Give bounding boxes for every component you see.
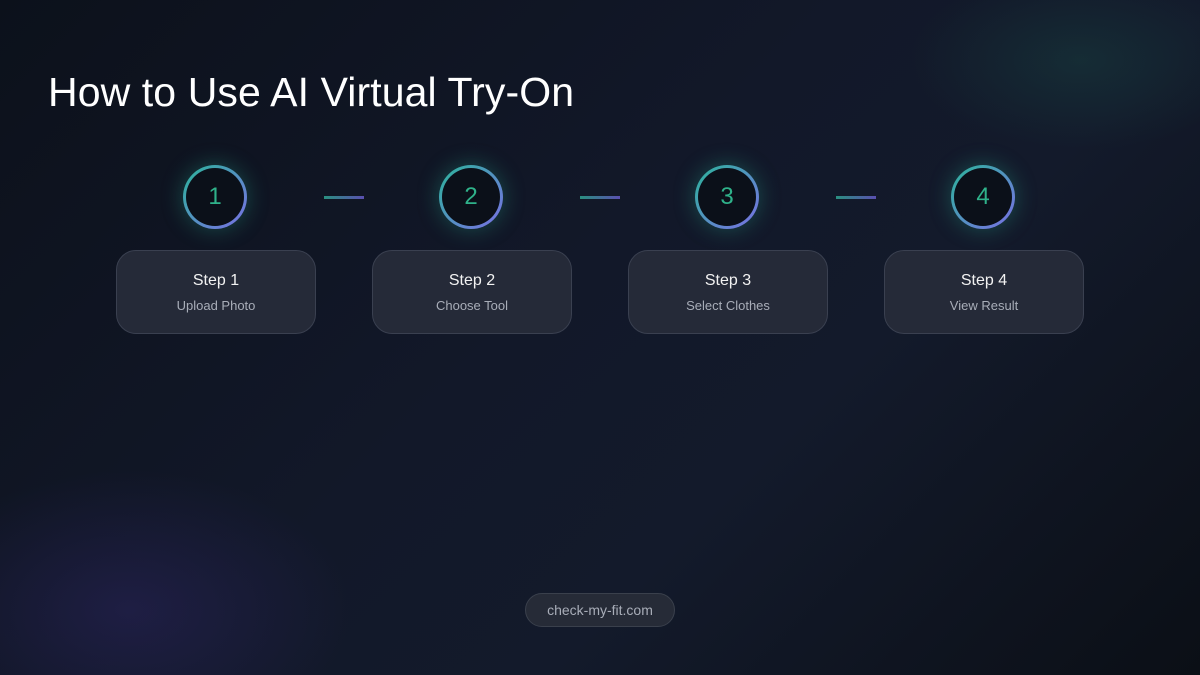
card: step 3 [628,250,828,334]
step circle 3: 3 [720,183,734,210]
card: step 1 [116,250,316,334]
footer url [525,593,675,627]
connector 2 [580,196,620,199]
step circle 2: 2 [464,183,478,210]
step circle 4: 4 [976,183,990,210]
card: step 3: Select Clothes [686,298,770,313]
connector 1 [324,196,364,199]
step circle 3 [695,165,759,229]
step circle 2 [439,165,503,229]
card: step 2 [372,250,572,334]
card: step 4 [884,250,1084,334]
card: step 2: Choose Tool [436,298,508,313]
step circle 4 [951,165,1015,229]
card: step 3: Step 3 [705,272,751,289]
title: How to Use AI Virtual Try-On [48,69,574,115]
card: step 4: Step 4 [961,272,1007,289]
card: step 4: View Result [950,298,1018,313]
card: step 2: Step 2 [449,272,495,289]
step circle 1 [183,165,247,229]
connector 3 [836,196,876,199]
step circle 1: 1 [208,183,222,210]
card: step 1: Step 1 [193,272,239,289]
footer url: check-my-fit.com [547,602,653,618]
card: step 1: Upload Photo [177,298,255,313]
